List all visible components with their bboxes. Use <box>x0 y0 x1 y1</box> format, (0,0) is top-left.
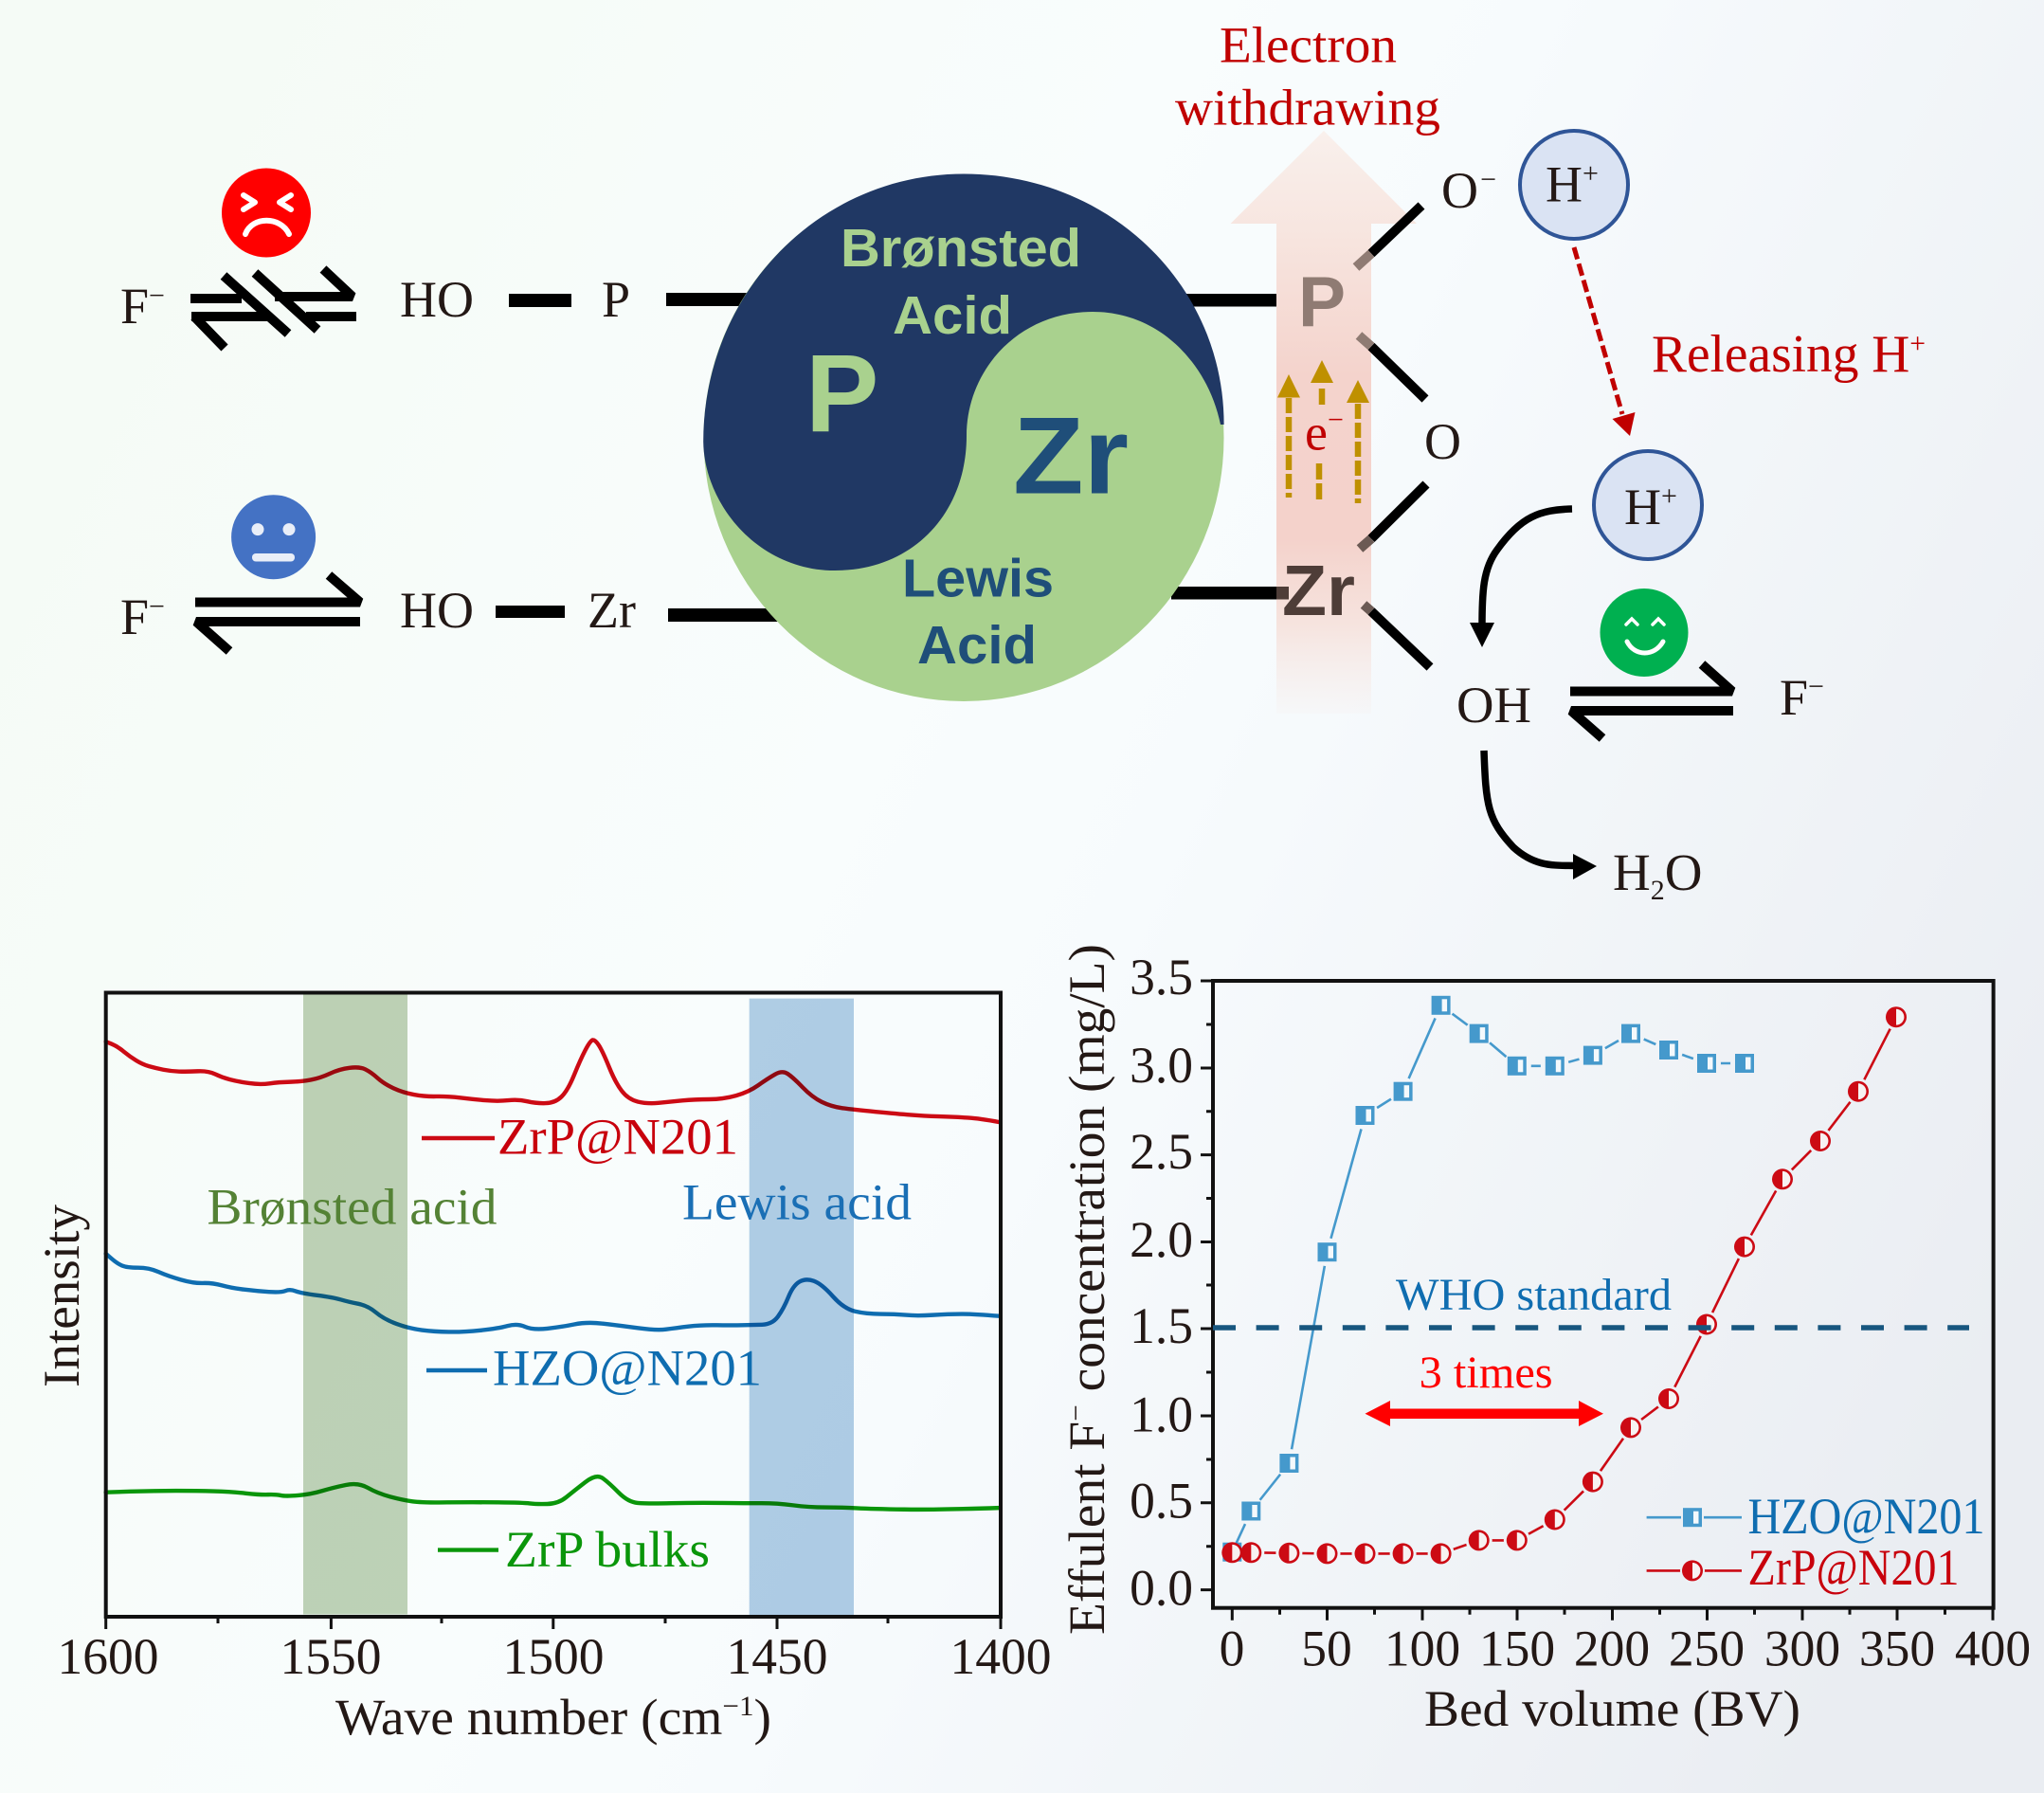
label: F- upper: F <box>120 278 149 335</box>
Lewis Acid text: Acid <box>917 615 1037 676</box>
Lewis Acid text <box>902 549 1054 676</box>
series: ZrP@N201 <box>1221 1006 1907 1564</box>
arrow: electron withdrawing band <box>1230 131 1417 714</box>
y axis title: concentration (mg/L) <box>1058 944 1115 1404</box>
legend: HZO: HZO@N201 <box>1747 1488 1984 1545</box>
label: P in arrow: P <box>1298 262 1346 341</box>
y tick labels: 3.5 <box>1130 949 1193 1005</box>
label: HO upper: HO <box>400 271 474 328</box>
y axis title: Intensity <box>33 1204 90 1387</box>
title: Electron withdrawing: withdrawing <box>1175 80 1440 136</box>
bonds right of sphere <box>1171 294 1289 599</box>
H+ bubble top: + <box>1583 157 1599 190</box>
label: HO lower: HO <box>400 582 474 639</box>
label: F- lower: − <box>149 591 165 622</box>
label: F- right: − <box>1808 671 1824 702</box>
bond: P to sphere <box>666 293 770 306</box>
Lewis Acid text: Lewis <box>902 549 1054 609</box>
label: F- upper: − <box>149 281 165 311</box>
x tick labels: 250 <box>1669 1621 1745 1677</box>
H+ bubble bottom <box>1594 451 1702 559</box>
big Zr: Zr <box>1013 396 1129 517</box>
x tick labels: 0 <box>1220 1621 1244 1677</box>
bond: Zr to sphere <box>668 608 791 622</box>
label: Releasing H+: Releasing H <box>1652 325 1912 384</box>
chart: breakthrough curves <box>1058 944 2031 1737</box>
H+ bubble top: H <box>1546 155 1583 212</box>
series: HZO@N201 <box>1222 996 1754 1562</box>
label: Zr lower: Zr <box>588 582 636 639</box>
legend: ZrP <box>1647 1539 1960 1596</box>
arrow: H+ to OH <box>1470 509 1572 647</box>
label: H2O: H <box>1613 843 1651 901</box>
x tick labels: 300 <box>1764 1621 1840 1677</box>
Bronsted Acid text <box>841 218 1081 346</box>
x tick labels: 200 <box>1574 1621 1650 1677</box>
title: Electron withdrawing: Electron <box>1220 17 1397 74</box>
icon: angry face <box>222 169 311 258</box>
top row: F- poorly exchanged at HO-P <box>120 269 770 348</box>
label: Zr in arrow: Zr <box>1282 551 1355 630</box>
arrow: releasing H+ <box>1574 247 1636 436</box>
legend: HZO <box>1647 1488 1984 1545</box>
label: P upper: P <box>602 271 630 328</box>
label: O-: O <box>1441 162 1478 219</box>
label: Bronsted acid: Brønsted acid <box>207 1179 497 1236</box>
x axis title: Bed volume (BV) <box>1424 1680 1800 1737</box>
icon: not-equilibrium arrows <box>190 269 356 348</box>
y tick labels <box>1130 949 1193 1617</box>
arrow: double headed red <box>1365 1401 1603 1426</box>
legend <box>1647 1488 1984 1596</box>
x axis title: Wave number (cm <box>335 1689 709 1746</box>
x axis title: −1 <box>722 1691 754 1722</box>
label: e-: − <box>1328 405 1344 436</box>
x tick labels: 150 <box>1479 1621 1555 1677</box>
title: Electron withdrawing <box>1175 17 1440 136</box>
chart: FTIR spectra <box>33 993 1052 1746</box>
band: Bronsted <box>303 993 407 1615</box>
x tick labels <box>57 1628 1052 1685</box>
icon: equilibrium arrows right <box>1570 664 1733 738</box>
y tick labels: 2.5 <box>1130 1123 1193 1180</box>
label: OH: OH <box>1456 677 1531 734</box>
WHO standard line <box>1213 1325 1969 1331</box>
label: Lewis acid: Lewis acid <box>682 1174 912 1231</box>
y tick labels: 3.0 <box>1130 1037 1193 1094</box>
icon: equilibrium arrows <box>195 575 360 651</box>
label: H2O: O <box>1665 843 1702 901</box>
label: O-: − <box>1480 164 1496 195</box>
label: H2O: 2 <box>1651 875 1665 906</box>
x tick labels <box>1220 1621 2031 1677</box>
icon: happy face <box>1600 589 1689 677</box>
frame and ticks <box>1201 981 1994 1621</box>
yin-yang sphere: P and Zr <box>703 174 1224 701</box>
legend: ZrP: ZrP@N201 <box>1747 1539 1960 1596</box>
bottom row: F- exchanged at HO-Zr <box>120 575 791 651</box>
label: WHO standard: WHO standard <box>1396 1270 1672 1320</box>
band: Lewis <box>750 999 854 1617</box>
big P: P <box>805 332 878 455</box>
x tick labels: 1600 <box>57 1628 159 1685</box>
label: 3 times: 3 times <box>1420 1348 1553 1398</box>
label: F- lower: F <box>120 589 149 645</box>
dashed gold electron arrows <box>1277 360 1369 503</box>
arrow: OH to H2O <box>1484 751 1597 879</box>
Bronsted Acid text: Acid <box>893 285 1012 346</box>
Bronsted Acid text: Brønsted <box>841 218 1081 279</box>
curves <box>106 1040 1000 1510</box>
y tick labels: 1.5 <box>1130 1297 1193 1354</box>
x tick labels: 1450 <box>726 1628 828 1685</box>
label: F- right: F <box>1780 669 1808 726</box>
legend: HZO@N201: HZO@N201 <box>493 1340 762 1397</box>
bonds around P and Zr <box>1276 206 1430 667</box>
label: Releasing H+: + <box>1909 328 1926 359</box>
x tick labels: 1550 <box>280 1628 381 1685</box>
x tick labels: 1400 <box>950 1628 1052 1685</box>
y tick labels: 2.0 <box>1130 1211 1193 1268</box>
label: e-: e <box>1305 405 1328 462</box>
x tick labels: 400 <box>1955 1621 2031 1677</box>
bond: HO-Zr <box>496 606 565 618</box>
bond: HO-P <box>509 294 571 307</box>
x axis title: ) <box>754 1689 771 1746</box>
H+ bubble top <box>1520 131 1628 239</box>
y tick labels: 1.0 <box>1130 1386 1193 1442</box>
H+ bubble bottom: H <box>1624 479 1661 535</box>
x tick labels: 1500 <box>502 1628 605 1685</box>
y axis title: − <box>1060 1404 1092 1422</box>
icon: neutral face <box>231 495 316 579</box>
x tick labels: 100 <box>1384 1621 1460 1677</box>
y axis title: Effulent F <box>1058 1429 1115 1635</box>
label: O: O <box>1424 413 1461 470</box>
x tick labels: 350 <box>1859 1621 1935 1677</box>
frame and ticks <box>106 993 1001 1629</box>
legend: ZrP bulks: ZrP bulks <box>505 1521 710 1578</box>
legend: ZrP@N201: ZrP@N201 <box>497 1109 738 1166</box>
y tick labels: 0.0 <box>1130 1560 1193 1617</box>
y tick labels: 0.5 <box>1130 1473 1193 1530</box>
x tick labels: 50 <box>1301 1621 1352 1677</box>
H+ bubble bottom: + <box>1661 480 1677 512</box>
